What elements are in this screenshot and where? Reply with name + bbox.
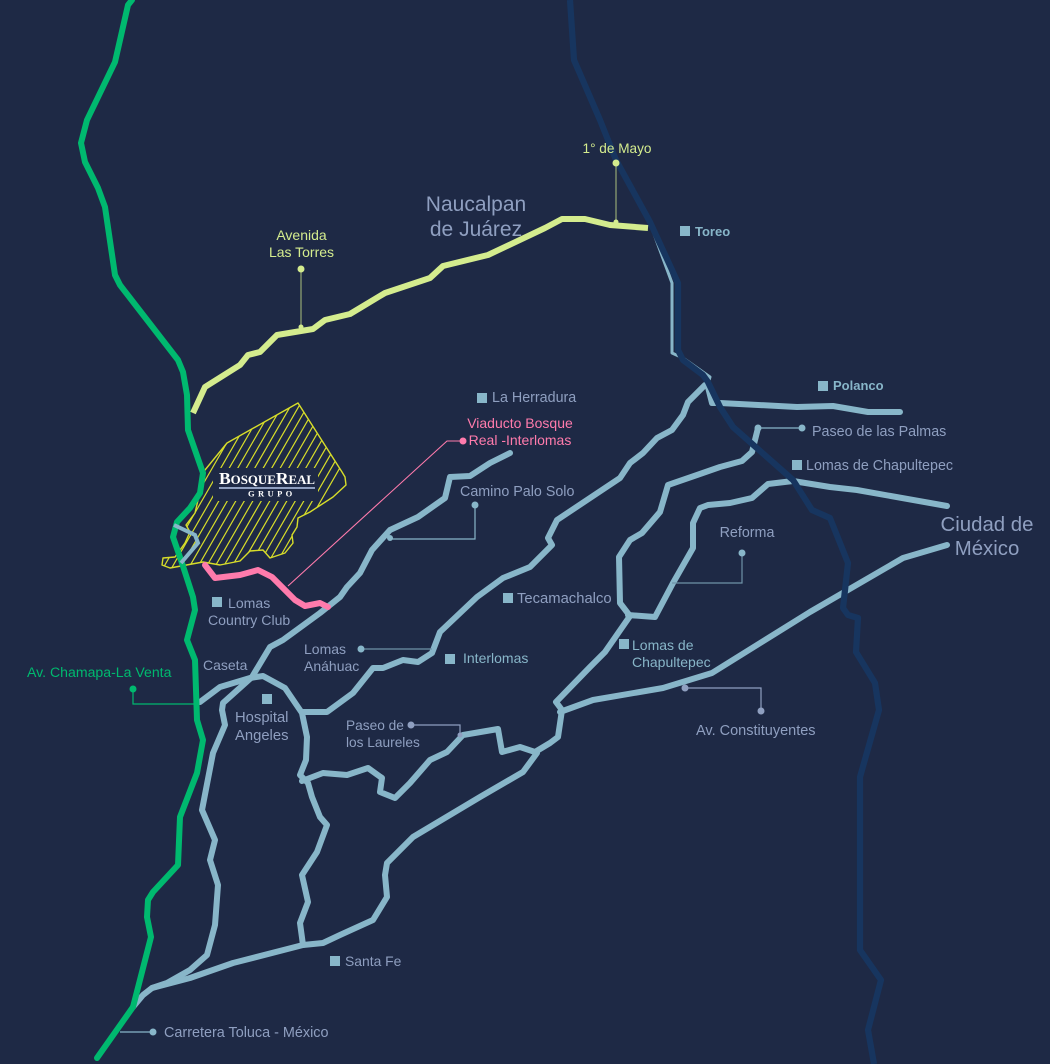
- callout: Reforma: [672, 525, 774, 583]
- label: Ciudad de México: Ciudad de: [941, 514, 1033, 536]
- logo: Bosque Real Grupo: BOSQUEREAL: [219, 469, 315, 488]
- place: Polanco: Polanco: [833, 378, 884, 393]
- place: Tecamachalco: Tecamachalco: [517, 591, 612, 607]
- area: Bosque Real hatched zone: [161, 402, 347, 569]
- road: pink viaduct: [205, 565, 328, 607]
- place: Lomas de Chapultepec (south): [619, 637, 711, 670]
- place: Lomas de Chapultepec (south): Chapultepec: [632, 654, 711, 670]
- callout: Viaducto Bosque Real-Interlomas: Real -Interlomas: [469, 432, 571, 448]
- callout: 1° de Mayo: [583, 141, 651, 224]
- label: Naucalpan de Juárez: Naucalpan: [426, 193, 526, 216]
- callout: Av. Constituyentes: Av. Constituyentes: [696, 723, 816, 739]
- callout: Paseo de los Laureles: Paseo de: [346, 718, 404, 733]
- callout: Avenida Las Torres: Las Torres: [269, 244, 334, 260]
- place: Santa Fe: Santa Fe: [345, 953, 402, 969]
- place: Interlomas: Interlomas: [463, 650, 528, 666]
- callout: Avenida Las Torres: [269, 227, 334, 330]
- road: yellow avenue: [193, 219, 648, 413]
- callout: Camino Palo Solo: Camino Palo Solo: [460, 484, 574, 500]
- callout: Viaducto Bosque Real-Interlomas: Viaducto Bosque: [467, 415, 573, 431]
- callout: Paseo de los Laureles: [346, 718, 462, 750]
- label: Naucalpan de Juárez: de Juárez: [430, 218, 522, 241]
- callout: Lomas Anáhuac: [304, 641, 432, 674]
- road: green highway: [81, 0, 203, 1058]
- road network: [133, 223, 947, 1007]
- label: Caseta: Caseta: [203, 657, 248, 673]
- callout: Paseo de las Palmas: Paseo de las Palmas: [812, 424, 946, 440]
- place: Hospital Angeles: Angeles: [235, 728, 288, 744]
- road: small connector: [174, 525, 198, 563]
- place: Lomas Country Club: [208, 595, 290, 628]
- callout: Lomas Anáhuac: Anáhuac: [304, 658, 359, 674]
- callout: Viaducto Bosque Real-Interlomas: [288, 415, 573, 586]
- callout: Reforma: Reforma: [720, 525, 774, 541]
- place: Hospital Angeles: Hospital: [235, 710, 288, 726]
- callout: Paseo de los Laureles: los Laureles: [346, 735, 420, 750]
- place: Lomas de Chapultepec (south): Lomas de: [632, 637, 694, 653]
- logo: Bosque Real Grupo: GRUPO: [248, 488, 296, 498]
- place: La Herradura: La Herradura: [492, 390, 576, 406]
- place: Lomas Country Club: Country Club: [208, 612, 290, 628]
- logo: Bosque Real Grupo: [213, 468, 318, 501]
- callout: Av. Chamapa-La Venta: Av. Chamapa-La Venta: [27, 664, 172, 680]
- callout: Carretera Toluca - México: Carretera Toluca - México: [164, 1025, 328, 1041]
- callout: Av. Chamapa-La Venta: [27, 664, 196, 704]
- river: dark blue road: [570, 0, 881, 1064]
- place: Hospital Angeles: [235, 694, 288, 744]
- label: Ciudad de México: [941, 514, 1033, 560]
- callout: Av. Constituyentes: [682, 684, 816, 739]
- callout: Avenida Las Torres: Avenida: [276, 227, 327, 243]
- place: Lomas de Chapultepec (north): Lomas de Chapultepec: [806, 458, 953, 474]
- place: Lomas Country Club: Lomas: [228, 595, 270, 611]
- callout: Camino Palo Solo: [387, 484, 574, 541]
- place: Toreo: Toreo: [695, 224, 730, 239]
- callout: 1° de Mayo: 1° de Mayo: [583, 141, 651, 156]
- callout: Lomas Anáhuac: Lomas: [304, 641, 346, 657]
- label: Naucalpan de Juárez: [426, 193, 526, 241]
- label: Ciudad de México: México: [955, 538, 1019, 560]
